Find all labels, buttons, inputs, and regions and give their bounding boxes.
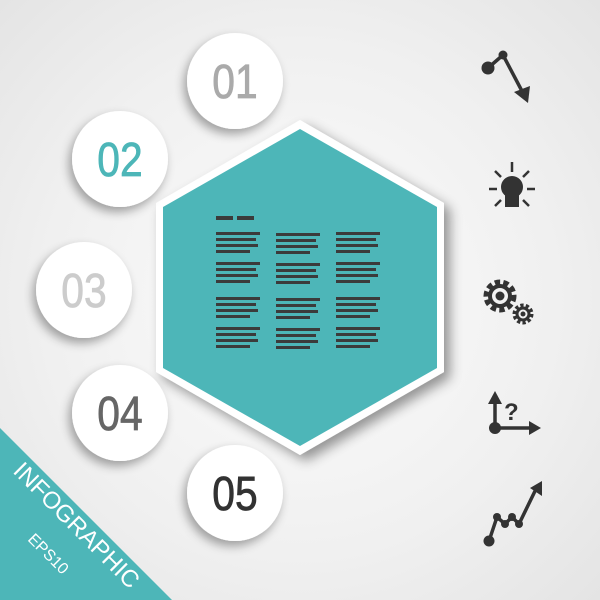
circle 05: 05	[212, 468, 258, 521]
circle 04	[72, 365, 168, 461]
icon: gears	[487, 283, 531, 322]
circle 01: 01	[212, 56, 258, 109]
hexagon panel	[156, 120, 444, 455]
circle 02	[72, 111, 168, 207]
circle 03	[36, 242, 132, 338]
icon: growth chart	[484, 481, 542, 546]
hexagon text block	[216, 216, 380, 349]
banner text: INFOGRAPHIC: INFOGRAPHIC	[8, 457, 145, 594]
circle 01	[187, 33, 283, 129]
circle 04: 04	[97, 388, 143, 441]
corner banner	[0, 428, 172, 600]
circle 05	[187, 445, 283, 541]
icon: axes question	[488, 391, 541, 435]
icon: axes question: ?	[504, 399, 519, 426]
circle 02: 02	[97, 134, 143, 187]
banner text: EPS10: EPS10	[24, 531, 71, 578]
icon: arrow down	[482, 50, 530, 103]
icon: lightbulb	[489, 162, 535, 207]
circle 03: 03	[61, 265, 107, 318]
